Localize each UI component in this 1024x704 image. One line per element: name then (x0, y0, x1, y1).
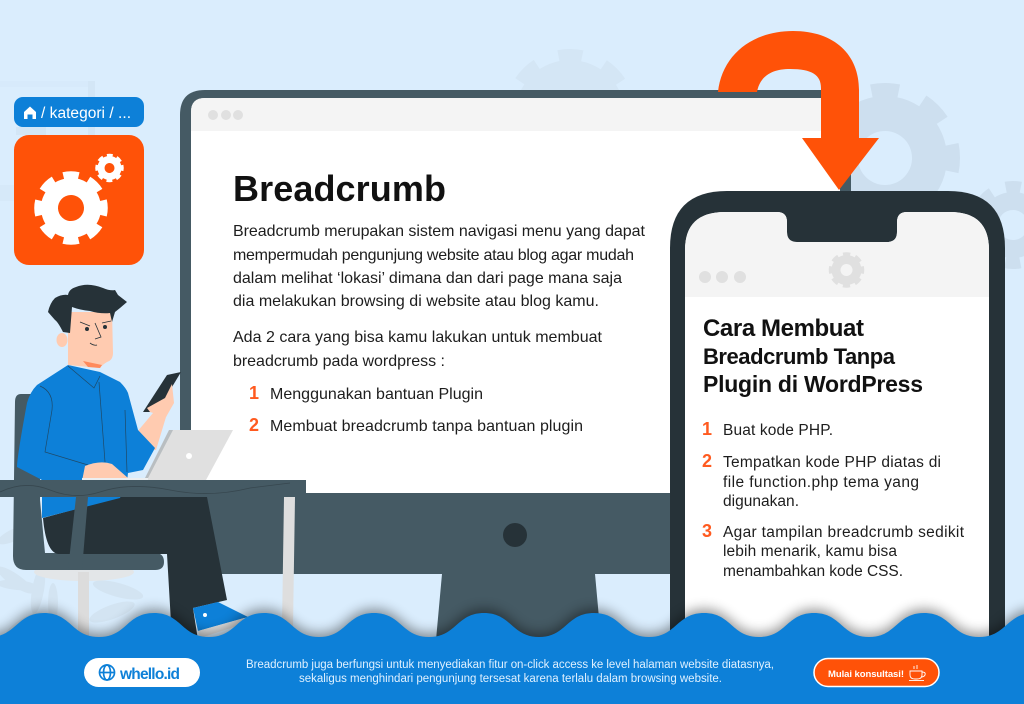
fingers (147, 384, 174, 417)
chair (13, 394, 164, 570)
phone gear (828, 251, 865, 289)
icon: home (24, 106, 36, 119)
background gear: top centre (502, 47, 638, 183)
phone list: 2 (702, 451, 712, 471)
phone list: digunakan. (723, 493, 799, 510)
list: Membuat breadcrumb tanpa bantuan plugin (270, 418, 583, 435)
table leg right (282, 497, 295, 626)
list: Menggunakan bantuan Plugin (270, 386, 483, 403)
hand on laptop (82, 462, 128, 481)
phone list: Agar tampilan breadcrumb sedikit (723, 524, 965, 541)
desktop monitor (180, 90, 851, 640)
footer (0, 613, 1024, 704)
phone header (685, 212, 989, 297)
monitor screen (191, 98, 840, 493)
table top (0, 480, 306, 497)
monitor frame (180, 90, 851, 574)
phone list (702, 419, 965, 580)
CTA button (814, 658, 939, 686)
phone screen (685, 212, 989, 650)
second paragraph: Ada 2 cara yang bisa kamu lakukan untuk membuat (233, 329, 603, 346)
monitor title bar (191, 98, 840, 131)
intro paragraph: dia melakukan browsing di website atau blog kamu. (233, 293, 599, 310)
phone dots (699, 271, 746, 283)
phone list: file function.php tema yang (723, 474, 919, 491)
phone heading (703, 315, 923, 397)
smartphone (670, 191, 1005, 650)
icon: coffee cup (909, 665, 925, 680)
whello logo pill (84, 658, 200, 687)
intro paragraph: Breadcrumb merupakan sistem navigasi menu yang dapat (233, 223, 646, 240)
phone heading: Cara Membuat (703, 315, 864, 342)
shoe (193, 602, 248, 638)
phone list: menambahkan kode CSS. (723, 563, 903, 580)
footer note (246, 659, 774, 685)
footer note: sekaligus menghindari pengunjung tersesat karena terlalu dalam browsing website. (299, 673, 722, 685)
main text block (233, 168, 646, 435)
chair leg (78, 572, 89, 638)
second paragraph: breadcrumb pada wordpress : (233, 353, 445, 370)
chin shadow (83, 361, 102, 368)
monitor camera (503, 523, 527, 547)
list (249, 383, 583, 435)
shirt (17, 365, 155, 518)
hair (48, 285, 127, 333)
chair base (34, 563, 134, 581)
ear (56, 333, 68, 347)
face and neck (68, 312, 113, 368)
monitor stand (436, 574, 601, 640)
phone list: Buat kode PHP. (723, 422, 833, 439)
CTA button: Mulai konsultasi! (828, 669, 904, 680)
list: 1 (249, 383, 259, 403)
trousers (43, 497, 227, 640)
intro paragraph: mempermudah pengunjung website atau blog agar mudah (233, 247, 634, 264)
background leaves (0, 522, 145, 642)
background gear: right large (806, 79, 964, 237)
eyes and smile (80, 321, 111, 345)
phone body (670, 191, 1005, 650)
phone list: 1 (702, 419, 712, 439)
logo text: whello.id (119, 666, 180, 683)
icon: globe (100, 665, 114, 680)
footer note: Breadcrumb juga berfungsi untuk menyediakan fitur on-click access ke level halaman website diatasnya, (246, 659, 774, 671)
shirt lines (40, 366, 127, 472)
window dots (208, 110, 243, 120)
background gear: right small (968, 180, 1024, 270)
person at desk (0, 285, 306, 640)
arm skin (137, 398, 172, 450)
phone list: 3 (702, 521, 712, 541)
heading: Breadcrumb (233, 168, 446, 209)
table leg left (68, 497, 88, 570)
second paragraph (233, 329, 603, 370)
arrow (718, 31, 879, 190)
laptop (82, 430, 233, 481)
phone heading: Breadcrumb Tanpa (703, 344, 896, 369)
background decoration: faint window shapes (0, 81, 95, 201)
phone in hand (143, 372, 181, 412)
footer wave shadow (0, 609, 1024, 700)
intro paragraph (233, 223, 646, 310)
footer wave (0, 613, 1024, 704)
icon tile: orange gears (14, 135, 144, 265)
phone list: lebih menarik, kamu bisa (723, 543, 897, 560)
phone heading: Plugin di WordPress (703, 371, 923, 397)
phone list: Tempatkan kode PHP diatas di (723, 454, 941, 471)
table wood grain (0, 483, 290, 496)
list: 2 (249, 415, 259, 435)
breadcrumb text: / kategori / ... (41, 105, 131, 122)
breadcrumb pill (14, 97, 144, 127)
intro paragraph: dalam melihat ‘lokasi’ dimana dan dari page mana saja (233, 270, 622, 287)
